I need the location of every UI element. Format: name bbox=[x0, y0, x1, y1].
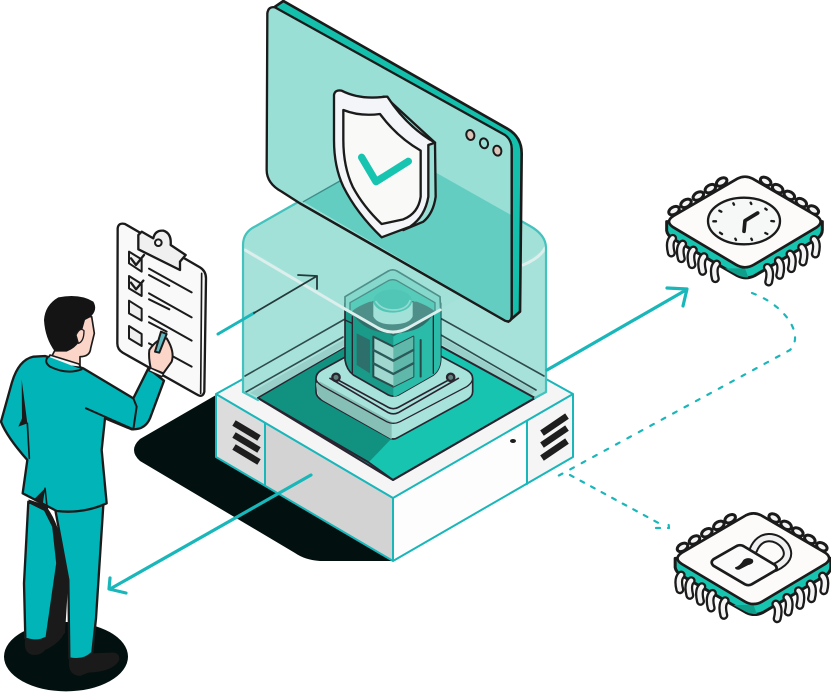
glass top face bbox=[243, 148, 546, 334]
left leg bbox=[24, 502, 57, 641]
dashed arrow to lock chip bbox=[570, 475, 669, 528]
window dots bbox=[465, 129, 502, 157]
clock face bbox=[708, 198, 780, 244]
arrow: to clock chip bbox=[547, 288, 687, 370]
plinth bbox=[316, 332, 473, 439]
clipboard bbox=[117, 224, 206, 396]
arrow: entering the machine bbox=[218, 275, 317, 334]
padlock icon bbox=[712, 538, 788, 585]
jacket bbox=[1, 356, 164, 512]
indicator dot bbox=[510, 439, 516, 443]
right leg bbox=[55, 505, 103, 659]
shield bbox=[334, 90, 436, 237]
central component bbox=[316, 270, 473, 439]
checklist lines bbox=[149, 269, 192, 367]
screws bbox=[332, 374, 454, 381]
neck and face bbox=[52, 317, 94, 367]
clip bbox=[138, 231, 186, 270]
top frame bbox=[345, 270, 441, 335]
shirt cuff bbox=[149, 368, 163, 377]
vent: right bbox=[542, 416, 567, 458]
hair bbox=[44, 296, 95, 352]
core stack bbox=[373, 337, 413, 387]
shoes bbox=[25, 632, 65, 655]
arrow: down-left bbox=[109, 475, 311, 593]
overlap with glass bbox=[303, 173, 511, 321]
cylinder body bbox=[345, 303, 441, 396]
jacket folds bbox=[86, 398, 137, 429]
base top face bbox=[216, 290, 573, 498]
shield check mark bbox=[362, 157, 408, 182]
inner leg shadow bbox=[28, 499, 68, 637]
clock hands bbox=[744, 213, 758, 231]
check marks bbox=[131, 255, 144, 289]
back wall lines bbox=[245, 318, 544, 398]
screen face bbox=[267, 7, 512, 321]
base right side bbox=[393, 394, 573, 561]
pen bbox=[155, 332, 167, 353]
glass white rim bbox=[245, 248, 545, 332]
shirt collar bbox=[48, 355, 81, 367]
vent: left bbox=[234, 423, 259, 462]
chamber floor bbox=[258, 320, 535, 480]
base left side bbox=[216, 394, 393, 561]
screen panel bbox=[267, 1, 522, 322]
glass outline bbox=[243, 148, 546, 400]
plinth inset rings bbox=[330, 378, 458, 414]
clock ticks bbox=[713, 203, 774, 240]
person bbox=[1, 296, 164, 691]
ear bbox=[76, 329, 84, 343]
lock chip bbox=[675, 512, 831, 619]
jacket collar bbox=[46, 357, 82, 372]
cap bbox=[373, 302, 413, 325]
hand bbox=[149, 338, 173, 373]
ground disc bbox=[4, 622, 128, 691]
shadow: machine floor shadow bbox=[134, 395, 392, 561]
machine base bbox=[216, 290, 573, 561]
clock chip bbox=[667, 175, 822, 282]
glass enclosure back walls bbox=[243, 148, 546, 400]
dashed connector to clock chip bbox=[558, 293, 795, 476]
screen edge bbox=[275, 1, 522, 322]
checklist boxes bbox=[129, 252, 142, 346]
